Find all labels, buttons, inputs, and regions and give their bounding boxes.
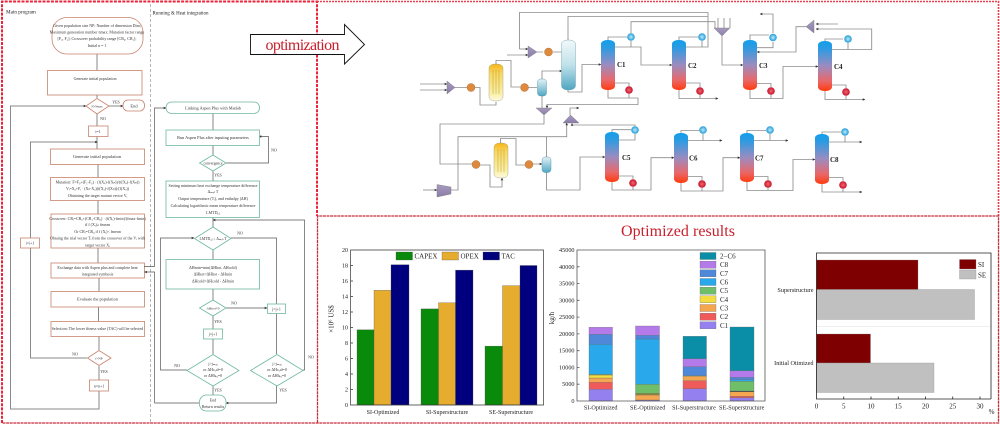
box: i=i+1: i=i+1 — [26, 240, 34, 246]
decision labels lower — [72, 352, 108, 374]
box: selection: Selection: The lower fitness value (TAC) will be selected — [52, 326, 143, 331]
box: selection — [51, 322, 144, 336]
process streams lower — [423, 108, 862, 192]
heater 2 — [520, 84, 528, 92]
box: setting temperature: LMTDᵢ,ⱼ — [206, 210, 220, 216]
y tick labels — [342, 248, 348, 409]
box: crossover: target vector Xᵢ — [85, 242, 110, 248]
y tick labels: 0 — [571, 398, 574, 405]
heater 5 — [525, 160, 533, 168]
box: heat duty: ΔHmin=min(ΔHhot, ΔHcold) — [189, 265, 238, 271]
decision: left termination: or ΔHhₒₜ=0 — [204, 373, 222, 378]
decision: left termination: or ΔHcₒₗd=0 — [203, 367, 223, 372]
y tick labels: 2 — [345, 388, 348, 394]
box: setting temperature — [166, 181, 260, 218]
y tick labels: 16 — [342, 279, 348, 285]
mixer: feed — [447, 81, 455, 94]
mixer: C2 and C1 tops — [714, 28, 730, 36]
mid divider — [817, 326, 991, 328]
legend: OPEX — [460, 252, 479, 260]
box: end return results: End — [210, 398, 216, 402]
legend: C6 — [720, 278, 729, 286]
column C7 — [740, 126, 774, 188]
legend — [960, 260, 986, 280]
x labels: SI-Optimized — [584, 404, 618, 412]
flowchart: running and heat integration — [144, 102, 314, 411]
axes — [577, 250, 765, 401]
x labels: SE-Superstructure — [719, 404, 765, 412]
stacked bar: SE-Superstructure — [730, 327, 754, 401]
y tick labels: 25000 — [559, 314, 574, 321]
box: generate initial population — [48, 70, 142, 95]
decision: i>NP — [88, 350, 111, 366]
chart: horizontal percentage bars — [774, 253, 995, 416]
y tick labels: 45000 — [559, 247, 574, 254]
decision: LMTD: LMTDᵢ,ⱼ ≥ Δₘᵢₙ T — [199, 236, 227, 242]
box: mutation: Vᵢ=Xₐ+Fᵢ · (Xₕ-Xₒ)(f(Xₐ)-f(Xₕ))/(f(Xₒ)) — [66, 186, 130, 191]
box: generate population — [50, 149, 144, 164]
heat duty labels: YES — [214, 319, 222, 324]
stacked bar: SE-Optimized — [636, 326, 660, 401]
legend: C3 — [720, 304, 729, 312]
column C2 — [672, 33, 706, 95]
box: heat duty — [166, 260, 260, 289]
y tick labels: 12 — [342, 310, 348, 316]
x labels — [367, 410, 533, 416]
convergence labels: YES — [214, 172, 222, 178]
y tick labels: 35000 — [559, 281, 574, 288]
decision labels lower: YES — [100, 369, 108, 374]
legend: CAPEX — [414, 252, 437, 260]
column C1 — [601, 33, 635, 94]
y tick labels: 5000 — [562, 381, 574, 388]
x tick labels: 15 — [895, 402, 902, 410]
x labels: SI-Optimized — [367, 410, 399, 416]
category labels: Superstructure — [777, 287, 814, 294]
x tick labels: % — [989, 408, 995, 416]
y tick labels: 15000 — [559, 348, 574, 355]
panel: main program and running flowcharts frame — [2, 2, 317, 423]
box: i=i+1 right: j=j+1 — [271, 306, 281, 312]
convergence labels — [214, 148, 277, 178]
box: heat duty: ΔHhot=ΔHhot - ΔHmin — [194, 272, 232, 276]
box: end — [123, 100, 144, 111]
bars: Superstructure — [816, 260, 974, 320]
x tick labels: 30 — [976, 402, 984, 410]
axes — [350, 250, 544, 405]
heat duty labels — [214, 300, 237, 324]
box: exchange data — [51, 263, 144, 278]
process streams upper — [420, 12, 872, 108]
termination labels: NO — [174, 363, 180, 368]
mixer: lower inlet — [536, 108, 552, 115]
y tick labels: 20000 — [559, 331, 574, 338]
decision: heat duty: ΔHhot≠0 — [207, 306, 220, 310]
box: mutation: Mutation: F=F₀+(F₁-F₀) · (f(Xₐ)-f(Xₕ))/(f(Xₒ)-f(Xₕ)) — [56, 180, 140, 184]
decision: convergence — [200, 155, 226, 171]
x tick labels: 20 — [922, 402, 930, 410]
y tick labels: 4 — [345, 372, 348, 378]
reactor 2 — [494, 143, 508, 178]
splitter — [563, 115, 579, 123]
box: i=i+1 — [20, 238, 40, 248]
axes — [816, 253, 991, 399]
x labels — [584, 404, 765, 412]
legend: TAC — [502, 252, 515, 260]
column C3: C3 — [759, 62, 768, 70]
x labels: SE-Superstructure — [489, 410, 533, 416]
column C3 — [743, 34, 777, 95]
column C8: C8 — [830, 156, 839, 164]
column C8 — [815, 128, 849, 189]
box: crossover: Obtaing the trial vector Tᵢ from the crossover of the Vᵢ with — [50, 236, 145, 240]
panel: process flowsheet frame — [317, 2, 998, 216]
start box: Given population size NP; Number of dimension Dim; — [53, 23, 141, 28]
termination labels: YES — [214, 388, 222, 392]
y tick labels: 10000 — [559, 364, 574, 371]
decision: right termination: j>jₘₐₓ — [271, 361, 282, 366]
heater 1 — [467, 84, 475, 92]
decision: n max: N>Nmax — [91, 104, 103, 108]
box: run aspen: Run Aspen Plus after inputing parameters — [177, 135, 249, 140]
box: end return results — [200, 395, 226, 411]
box: i=i+1 right — [268, 304, 286, 314]
box: j=j+1: j=j+1 — [208, 332, 217, 336]
legend: SI — [978, 261, 985, 269]
column C5: C5 — [622, 154, 631, 162]
stacked bar: SI-Superstructure — [683, 336, 706, 401]
legend: C5 — [720, 287, 729, 295]
heat duty labels: NO — [231, 300, 237, 306]
box: i=1 — [88, 126, 108, 136]
x labels: SE-Optimized — [630, 404, 666, 412]
start box: Maximum generation number nmax; Mutation factor range — [50, 30, 145, 34]
column C6 — [674, 126, 707, 188]
reactor 1 — [489, 64, 503, 101]
box: linking aspen: Linking Aspen Plus with Matlab — [185, 106, 241, 110]
y tick labels: 0 — [345, 403, 348, 409]
LMTD no label: NO — [237, 230, 243, 236]
decision labels: YES — [112, 100, 120, 104]
start box — [50, 18, 145, 54]
heading: main program: Main program — [6, 10, 36, 16]
y tick labels: 20 — [342, 248, 348, 254]
flowchart: main program — [10, 18, 146, 409]
divider between main program and running — [150, 4, 152, 422]
column C1: C1 — [617, 61, 626, 69]
box: crossover: Crossover: CRᵢ=CR₀+(CR₁-CR₀) · (f(Xᵢ)-fmin)/(fmax-fmin) — [49, 216, 146, 221]
x tick labels: 25 — [949, 402, 957, 410]
bars: SE-Superstructure — [485, 266, 537, 405]
column C4 — [818, 35, 852, 96]
decision: right termination: or ΔHhₒₜ=0 — [268, 373, 286, 378]
x tick labels: 0 — [815, 402, 819, 410]
decision labels lower: NO — [72, 352, 78, 356]
decision: left termination — [187, 354, 239, 386]
decision labels: NO — [100, 116, 106, 121]
panel: optimized results frame — [2, 216, 998, 423]
decision: LMTD — [194, 227, 231, 250]
x labels: SI-Superstructure — [672, 404, 716, 412]
box: crossover: if f (Xᵢ)≥ fmean — [85, 222, 110, 227]
chart: cost bars — [328, 248, 544, 416]
box: linking aspen — [166, 102, 260, 114]
box: setting temperature: Calculating logarithmic mean temperature difference — [171, 203, 256, 208]
termination labels: YES — [279, 388, 287, 392]
bars: Initial Optimized — [816, 334, 934, 392]
x tick labels: 10 — [868, 402, 875, 410]
legend — [700, 252, 736, 330]
box: exchange data: integrated synthesis — [82, 272, 114, 276]
y tick labels: 40000 — [559, 264, 574, 271]
legend: C8 — [720, 261, 729, 269]
box: run aspen — [166, 130, 260, 146]
y axis title: ×10⁶ US$ — [328, 305, 336, 333]
box: evaluate: Evaluate the population — [77, 296, 119, 302]
box: end return results: Return results — [202, 404, 225, 409]
column C4: C4 — [834, 63, 843, 71]
absorber column — [562, 40, 576, 90]
bars: SI-Optimized — [357, 265, 409, 405]
flash drum 1 — [538, 79, 546, 96]
box: mutation: Obtaining the target mutant vector Vᵢ — [68, 193, 128, 198]
x labels: SI-Superstructure — [426, 410, 468, 416]
heater 4 — [472, 160, 480, 168]
y tick labels: 10 — [342, 326, 348, 332]
y tick labels: 8 — [345, 341, 348, 347]
chart: stacked flow bars — [548, 247, 765, 412]
column C7: C7 — [755, 154, 764, 162]
column C5 — [605, 126, 639, 187]
x tick labels: 5 — [842, 402, 846, 410]
box: n=n+1 — [90, 380, 108, 391]
heater 3 — [544, 48, 552, 56]
box: generate population: Generate initial population — [73, 154, 122, 159]
arrow: optimization: optimization — [266, 37, 340, 54]
y tick labels: 30000 — [559, 297, 574, 304]
category labels: Initial Otimized — [774, 360, 814, 367]
mixer: recycle — [528, 46, 537, 58]
decision: n max — [86, 98, 109, 114]
y axis title: kg/h — [548, 311, 556, 324]
convergence labels: NO — [271, 148, 277, 152]
termination labels: NO — [308, 354, 314, 360]
heading: optimized results: Optimized results — [621, 223, 735, 240]
flowsheet: upper train — [420, 12, 872, 108]
y tick labels: 14 — [342, 294, 348, 300]
stacked bar: SI-Optimized — [589, 327, 612, 401]
box: setting temperature: Δₘᵢₙ T — [208, 189, 219, 194]
termination labels — [174, 354, 314, 392]
legend: SE — [978, 272, 986, 280]
mixer: C3 side feed — [806, 20, 814, 33]
box: generate initial population: Generate initial population — [74, 76, 116, 81]
legend: C2 — [720, 313, 729, 321]
box: heat duty: ΔHcold=ΔHcold - ΔHmin — [192, 278, 234, 284]
legend — [396, 252, 515, 260]
decision: convergence: convergence — [203, 162, 223, 166]
box: setting temperature: Setting minimum heat exchange temperature difference — [169, 183, 258, 188]
box: setting temperature: Output temperature (Tᵢ), and enthalpy (ΔH) — [178, 196, 248, 202]
box: n=n+1: n=n+1 — [94, 384, 104, 388]
start box: [F₀, F₁]; Crossover probability range [CR₀, CR₁]; — [58, 36, 136, 42]
compressor — [437, 184, 451, 197]
y tick labels — [559, 247, 574, 405]
y tick labels: 18 — [342, 264, 348, 270]
start box: Initial n = 1 — [88, 43, 106, 48]
box: i=1: i=1 — [95, 129, 101, 134]
column C6: C6 — [689, 154, 698, 162]
decision: right termination — [250, 354, 303, 386]
box: evaluate — [51, 292, 144, 307]
legend: C7 — [720, 270, 729, 278]
heading: running and heat integration: Running & Heat integration — [152, 12, 209, 16]
decision: right termination: or ΔHcₒₗd=0 — [267, 367, 287, 372]
box: mutation — [50, 178, 144, 200]
legend: C1 — [720, 322, 729, 330]
legend: C4 — [720, 296, 729, 304]
legend: 2−C6 — [720, 252, 736, 260]
flowsheet: lower train — [423, 108, 862, 197]
arrow: optimization — [250, 24, 364, 64]
decision: left termination: j>jₘₐₓ — [207, 361, 218, 366]
flash drum 2 — [542, 157, 551, 172]
decision: heat duty — [200, 300, 226, 316]
decision labels — [100, 100, 120, 121]
column C2: C2 — [688, 62, 697, 70]
y tick labels: 6 — [345, 356, 348, 362]
box: crossover — [49, 214, 146, 248]
box: j=j+1 — [204, 329, 222, 339]
decision: i>NP: i>NP — [95, 356, 103, 360]
box: crossover: Or CRᵢ=CR₀ if f (Xᵢ)< fmean — [74, 229, 121, 234]
category labels — [774, 287, 814, 367]
bars: SI-Superstructure — [421, 270, 473, 405]
x tick labels — [815, 402, 995, 416]
box: exchange data: Exchange data with Aspen plus and complete heat — [57, 265, 139, 270]
box: end: End — [130, 104, 138, 108]
